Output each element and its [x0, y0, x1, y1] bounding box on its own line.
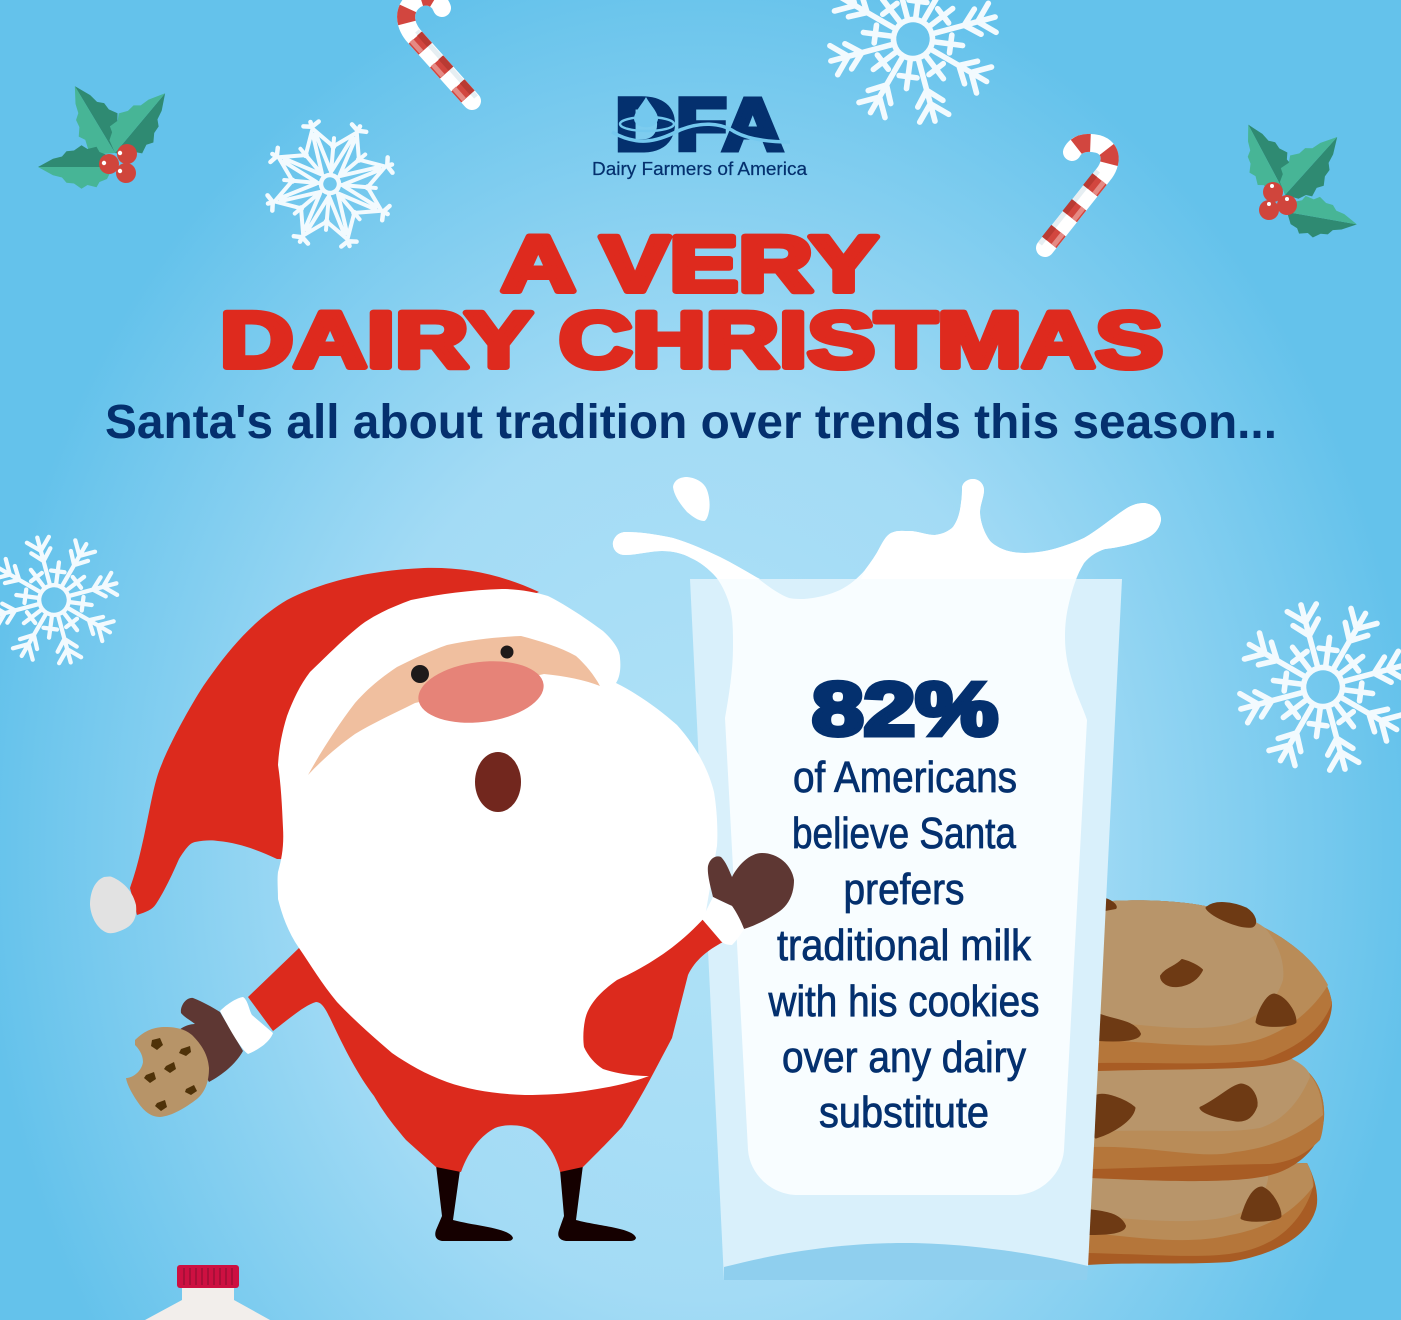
icon: candy cane top: [406, 0, 476, 104]
logo: Dairy Farmers of America: [592, 83, 808, 179]
icon: snowflake star left: [248, 102, 412, 266]
subtitle: Santa's all about tradition over trends this season...: [105, 396, 1277, 449]
statistic: over any dairy: [782, 1033, 1026, 1082]
icon: bitten cookie: [126, 1027, 209, 1117]
statistic: traditional milk: [777, 921, 1032, 970]
milk splash above the rim: [613, 479, 1161, 579]
santa: pom-pom: [90, 877, 136, 933]
logo: Dairy Farmers of America: DFA: [615, 83, 783, 166]
milk body and splash: [613, 479, 1161, 1195]
milk level at glass bottom: [724, 1243, 1088, 1280]
santa: red suit: [248, 850, 723, 1172]
statistic: with his cookies: [768, 977, 1040, 1026]
cookie: top: [1098, 898, 1332, 1071]
cookie: bottom: [1085, 1163, 1317, 1265]
santa: left cuff: [220, 997, 273, 1054]
logo: Dairy Farmers of America: Dairy Farmers of America: [592, 158, 808, 179]
milk glass: [613, 477, 1161, 1280]
title: DAIRY CHRISTMAS: [220, 295, 1163, 384]
icon: candy cane right: [1040, 143, 1110, 251]
cookie stack: [1085, 898, 1332, 1265]
santa: beard and hat trim: [278, 589, 717, 1095]
milk droplet: [673, 477, 710, 521]
icon: milk jug: [145, 1265, 270, 1320]
statistic: believe Santa: [792, 809, 1016, 858]
santa: right mitten: [708, 853, 794, 929]
santa: [90, 568, 794, 1241]
cookie: middle: [1090, 1058, 1324, 1181]
icon: snowflake top centre: [809, 0, 1017, 143]
santa: hat: [130, 568, 539, 915]
title: A VERY: [501, 219, 878, 308]
title: [220, 219, 1163, 384]
icon: holly right: [1229, 115, 1360, 245]
santa: right cuff: [702, 897, 744, 945]
statistic: substitute: [819, 1088, 989, 1137]
santa: cookie hand: [179, 998, 243, 1082]
santa: face: [308, 636, 600, 775]
santa: nose: [415, 655, 547, 729]
icon: snowflake right edge: [1219, 583, 1401, 791]
statistic: 82%: [812, 667, 998, 751]
santa: eye right: [500, 646, 514, 658]
statistic: [768, 667, 1040, 1137]
icon: holly left: [38, 74, 182, 189]
icon: snowflake left edge: [0, 521, 133, 679]
statistic: prefers: [844, 865, 964, 914]
statistic: of Americans: [793, 753, 1017, 802]
santa: legs and boots: [435, 1165, 636, 1241]
santa: eye left: [411, 665, 429, 683]
santa: mouth: [475, 752, 521, 812]
